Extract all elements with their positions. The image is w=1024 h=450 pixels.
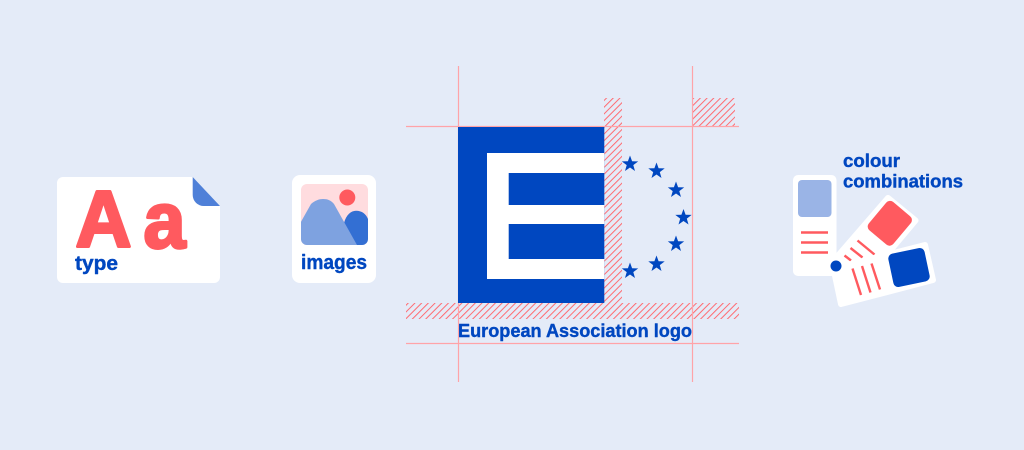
icon: picture: [301, 184, 368, 245]
letter a: a: [144, 176, 186, 264]
swatch card 3: [834, 245, 933, 304]
logo: letter E: [458, 127, 604, 303]
infographic canvas: [57, 66, 962, 382]
heading: colour combinations: combinations: [843, 172, 963, 192]
logo: stars: [622, 156, 692, 278]
letter A: A: [76, 174, 132, 264]
label: images: images: [301, 252, 367, 274]
label: logo name: European Association logo: [458, 320, 692, 341]
clear-space hatching: [406, 98, 739, 319]
panel: colour combinations: [793, 151, 963, 304]
panel: logo construction: [406, 66, 739, 382]
label: type: type: [75, 253, 118, 275]
heading: colour combinations: colour: [843, 151, 900, 171]
guide lines: [406, 66, 739, 382]
images card: [292, 175, 376, 283]
icon: folded corner: [193, 177, 220, 206]
swatch card 2: [836, 198, 916, 284]
type card: [57, 177, 220, 283]
icon: pivot dot: [830, 260, 842, 272]
swatch card 1: [793, 175, 836, 276]
panel: images: [292, 175, 376, 283]
panel: type: [57, 174, 220, 283]
